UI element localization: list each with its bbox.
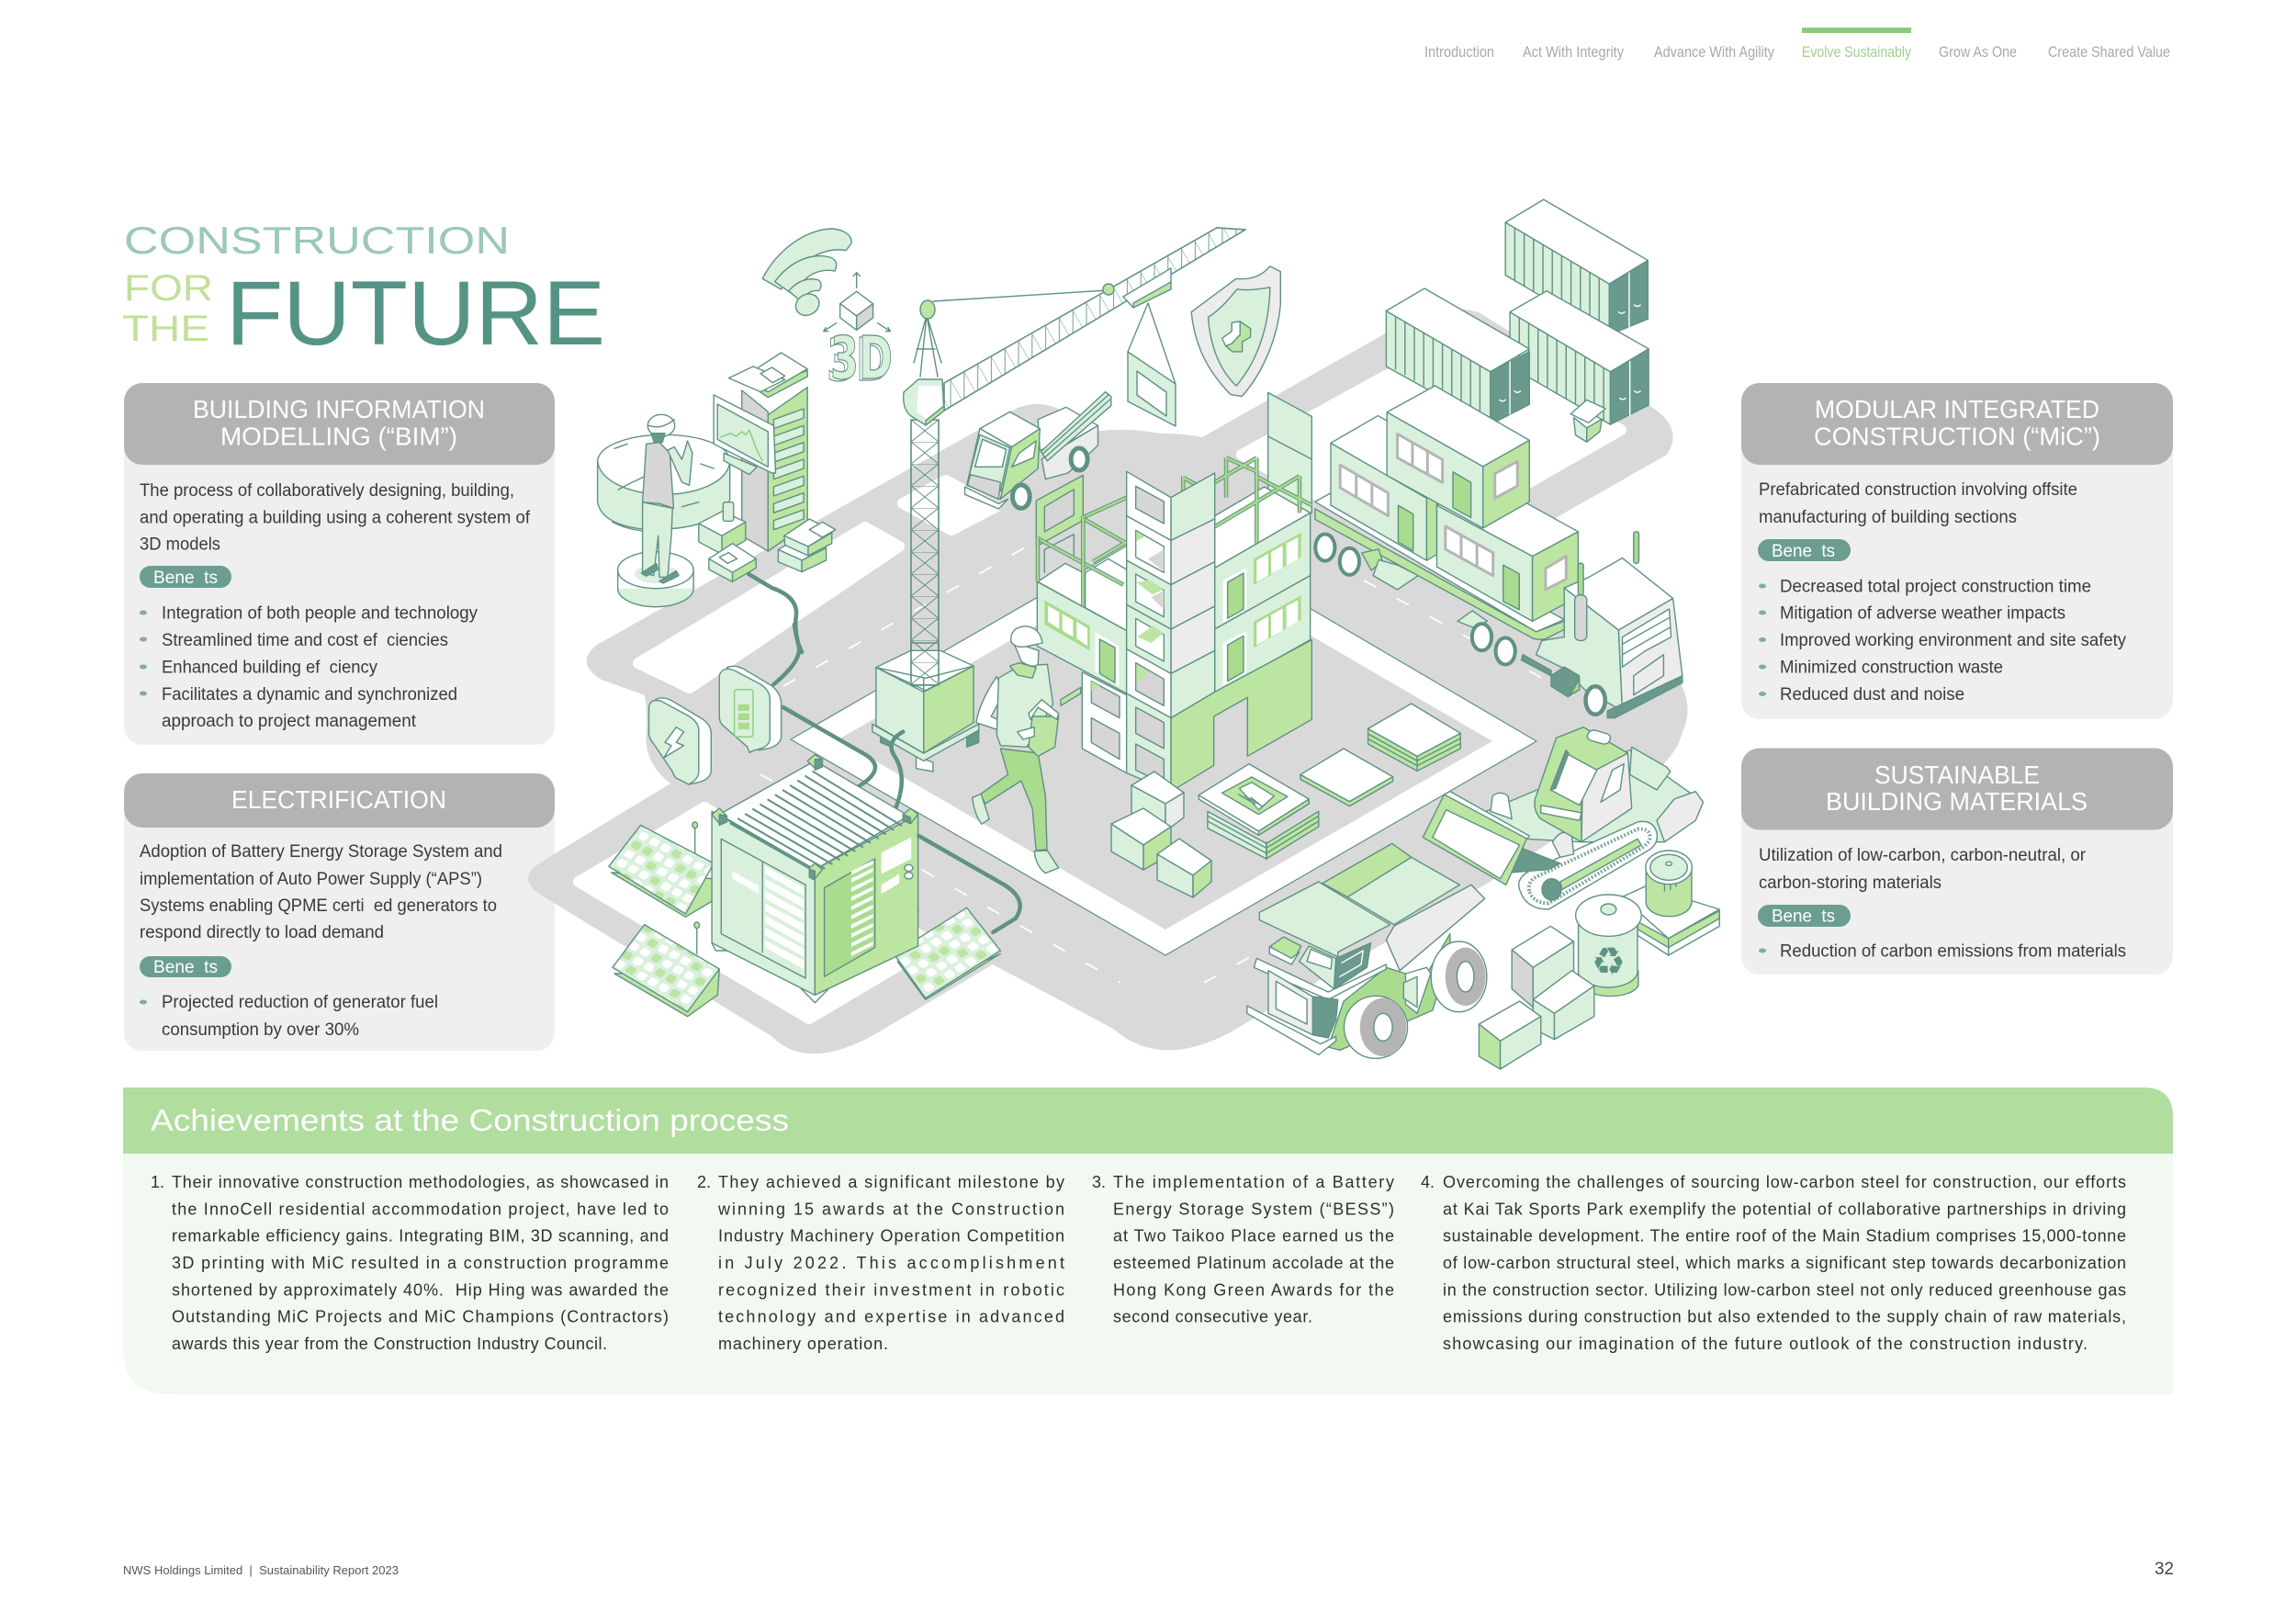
server tower with monitor (714, 353, 807, 551)
panel: Sustainable building materials: SUSTAINABLE (1874, 761, 2040, 789)
delivery truck with rebar (965, 392, 1111, 509)
main title: CONSTRUCTION (124, 219, 510, 262)
dump truck (1247, 843, 1487, 1058)
panel: BIM: BUILDING INFORMATION (193, 395, 485, 423)
modules on flatbed truck (1315, 386, 1578, 664)
panel: MiC (1741, 383, 2173, 719)
achievement 2: They achieved a significant milestone by (718, 1173, 1064, 1191)
panel: BIM: and operating a building using a coherent system of (140, 509, 531, 527)
pile of cubes by building (1111, 772, 1211, 897)
panel: Electrification: Systems enabling QPME certi ed generators to (140, 896, 497, 916)
achievement 4: in the construction sector. Utilizing low-carbon steel not only reduced greenhouse gas (1443, 1280, 2126, 1299)
achievement 2: 2. (697, 1173, 711, 1191)
panel: MiC: Decreased total project construction time (1780, 577, 2091, 597)
panel: MiC: MODULAR INTEGRATED (1815, 395, 2099, 423)
achievement 1: 3D printing with MiC resulted in a construction programme (172, 1254, 669, 1272)
achievement 1: Their innovative construction methodologies, as showcased in (172, 1173, 669, 1191)
icon: wifi (762, 229, 851, 319)
panel: Electrification: ELECTRIFICATION (231, 785, 446, 814)
panel: MiC: Prefabricated construction involving offsite (1759, 480, 2077, 500)
achievement 4: showcasing our imagination of the future outlook of the construction industry. (1443, 1335, 2088, 1353)
panel: BIM: 3D models (140, 535, 220, 555)
material boxes (1479, 926, 1594, 1069)
icon: safety shield (1191, 266, 1280, 397)
panel: Sustainable building materials: carbon-storing materials (1759, 873, 1941, 893)
footer: NWS Holdings Limited | Sustainability Report 2023 (123, 1563, 399, 1577)
top navigation (1424, 28, 2170, 61)
road network (528, 309, 1688, 1054)
achievement 3: Hong Kong Green Awards for the (1113, 1280, 1394, 1299)
achievement 4: 4. (1421, 1173, 1435, 1191)
achievement 1: Outstanding MiC Projects and MiC Champions (Contractors) (172, 1308, 669, 1326)
achievements background (123, 1139, 2173, 1394)
achievement 4 (1421, 1173, 2126, 1353)
achievement 3: at Two Taikoo Place earned us the (1113, 1227, 1394, 1245)
achievement 3: 3. (1092, 1173, 1106, 1191)
panel: Electrification: Projected reduction of generator fuel (162, 993, 438, 1012)
icon: 3D label: 3D (827, 327, 891, 395)
panel: Electrification: consumption by over 30% (162, 1020, 359, 1040)
boxes and cable beside tower (699, 502, 836, 652)
illustration: isometric construction site (528, 199, 1719, 1069)
panel: Electrification: Bene ts (153, 958, 218, 977)
achievement 2: in July 2022. This accomplishment (718, 1254, 1064, 1272)
achievement 1: remarkable efficiency gains. Integrating BIM, 3D scanning, and (172, 1227, 669, 1245)
achievement 4: sustainable development. The entire roof of the Main Stadium comprises 15,000-tonne (1443, 1227, 2126, 1245)
achievement 2 (697, 1173, 1064, 1353)
achievement 2: Industry Machinery Operation Competition (718, 1227, 1064, 1245)
top navigation: Advance With Agility (1654, 43, 1774, 61)
main title (122, 219, 605, 364)
panel: BIM: Bene ts (153, 569, 218, 588)
panel: Electrification: implementation of Auto Power Supply (“APS”) (140, 870, 482, 889)
main title: THE (122, 309, 209, 349)
icon: battery bubble (719, 625, 799, 752)
top navigation: Act With Integrity (1523, 43, 1624, 61)
achievement 1: the InnoCell residential accommodation project, have led to (172, 1200, 669, 1218)
achievement 4: of low-carbon structural steel, which marks a significant step towards decarbonization (1443, 1254, 2126, 1272)
panel: BIM: Enhanced building ef ciency (162, 658, 377, 678)
person at holographic ring (598, 414, 730, 607)
achievement 2: recognized their investment in robotic (718, 1280, 1064, 1299)
panel: MiC: Improved working environment and site safety (1780, 631, 2126, 650)
achievement 3 (1092, 1173, 1394, 1326)
achievements heading banner (123, 1088, 2173, 1154)
stacked precast slabs (1199, 704, 1460, 860)
achievement 1: awards this year from the Construction Industry Council. (172, 1335, 607, 1353)
panel: BIM: MODELLING (“BIM”) (220, 423, 457, 450)
crane base pallet (872, 650, 979, 772)
footer (123, 1560, 2174, 1579)
panel: BIM (124, 383, 555, 745)
achievement 4: at Kai Tak Sports Park exemplify the potential of collaborative partnerships in driving (1443, 1200, 2126, 1218)
panel: BIM: Streamlined time and cost ef ciencies (162, 631, 448, 650)
panel: MiC: Mitigation of adverse weather impacts (1780, 604, 2065, 623)
achievement 3: esteemed Platinum accolade at the (1113, 1254, 1394, 1272)
top navigation: Grow As One (1939, 43, 2017, 61)
achievement 4: Overcoming the challenges of sourcing low-carbon steel for construction, our efforts (1443, 1173, 2126, 1191)
panel: Sustainable building materials: BUILDING MATERIALS (1826, 787, 2088, 816)
panel: MiC: manufacturing of building sections (1759, 508, 2017, 527)
construction worker (973, 626, 1059, 873)
panel: Sustainable building materials: Utilization of low-carbon, carbon-neutral, or (1759, 846, 2087, 865)
tower bottom over base (911, 643, 939, 685)
top navigation: Evolve Sustainably (1802, 43, 1911, 61)
panel: Electrification: Adoption of Battery Energy Storage System and (140, 842, 502, 862)
paint can on slabs (1622, 851, 1719, 955)
icon: power bolt bubble (648, 698, 711, 784)
achievement 3: Energy Storage System (“BESS”) (1113, 1200, 1394, 1218)
achievements heading banner: Achievements at the Construction process (151, 1103, 789, 1137)
top navigation: Introduction (1424, 43, 1494, 61)
tower crane (904, 228, 1245, 686)
main title: FUTURE (226, 262, 605, 364)
panel: BIM: Integration of both people and technology (162, 604, 478, 623)
panel: achievements (123, 1088, 2173, 1394)
achievement 1: 1. (151, 1173, 164, 1191)
panel: MiC: CONSTRUCTION (“MiC”) (1814, 423, 2100, 450)
panel: Sustainable building materials: Reduction of carbon emissions from materials (1780, 942, 2126, 961)
icon: 3D label: 3D (830, 325, 893, 393)
shipping containers (1386, 199, 1649, 424)
panel: BIM: The process of collaboratively designing, building, (140, 481, 514, 501)
recycling bin: ♻ (1592, 939, 1626, 985)
truck cab (1521, 532, 1683, 718)
achievement 4: emissions during construction but also extended to the supply chain of raw materials, (1443, 1308, 2126, 1326)
trash bin (1570, 400, 1605, 442)
achievement 2: machinery operation. (718, 1335, 888, 1353)
achievement 2: winning 15 awards at the Construction (717, 1200, 1064, 1218)
achievement 3: The implementation of a Battery (1113, 1173, 1394, 1191)
panel: MiC: Minimized construction waste (1780, 658, 2003, 678)
panel: BIM: Facilitates a dynamic and synchronized (162, 685, 457, 704)
panel: MiC: Reduced dust and noise (1780, 685, 1964, 704)
panel: BIM: approach to project management (162, 712, 417, 731)
achievement 3: second consecutive year. (1113, 1308, 1312, 1326)
panel: Sustainable building materials: Bene ts (1772, 907, 1835, 926)
main title: FOR (124, 268, 213, 309)
top navigation: Create Shared Value (2048, 43, 2170, 61)
panel: Sustainable building materials (1741, 748, 2173, 975)
footer: 32 (2155, 1560, 2174, 1579)
achievement 2: technology and expertise in advanced (718, 1308, 1064, 1326)
recycling bin (1576, 895, 1641, 997)
central modular building (1036, 392, 1311, 792)
icon: 3D cube with arrows (824, 273, 890, 332)
panel: Electrification (124, 773, 555, 1051)
battery energy storage container (712, 707, 1020, 1003)
achievement 1: shortened by approximately 40%. Hip Hing was awarded the (172, 1280, 669, 1299)
achievement 1 (151, 1173, 669, 1353)
solar panels (609, 822, 1000, 1017)
bulldozer (1423, 727, 1704, 909)
panel: Electrification: respond directly to load demand (140, 923, 384, 942)
panel: MiC: Bene ts (1772, 542, 1835, 561)
